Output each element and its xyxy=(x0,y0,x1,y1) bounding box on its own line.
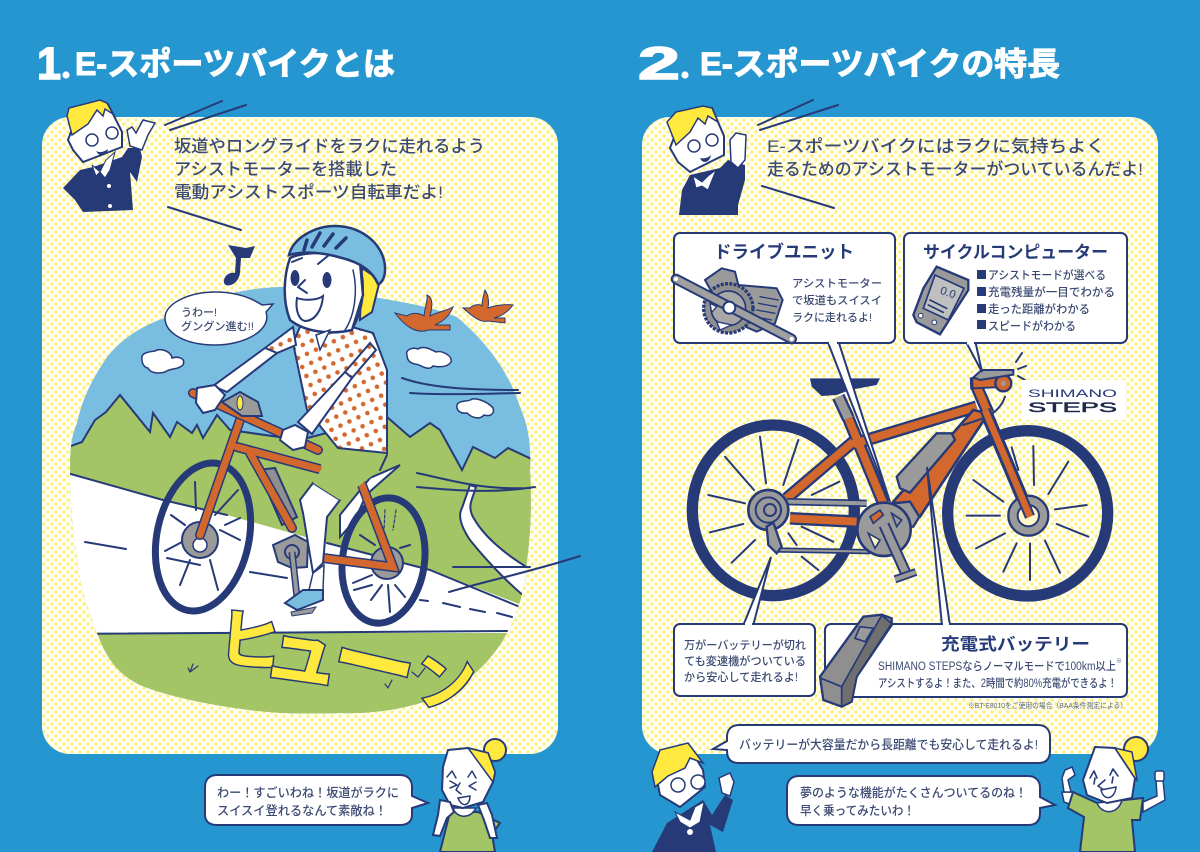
gloves xyxy=(196,385,225,413)
panel: what is an e-sports bike xyxy=(42,117,558,754)
battery on frame xyxy=(897,433,955,493)
text: intro left: 電動アシストスポーツ自転車だよ! xyxy=(174,183,443,202)
callout: cycle computer xyxy=(904,233,1127,372)
character: man bottom xyxy=(652,743,734,852)
speech bubble: woman right: 夢のような機能がたくさんついてるのね！ xyxy=(800,785,1027,800)
callout: battery: SHIMANO STEPSならノーマルモードで100km以上 xyxy=(878,660,1116,673)
speech bubble: woman left xyxy=(205,775,428,825)
far arm xyxy=(213,348,277,392)
callout: battery: ※ xyxy=(1116,659,1122,665)
sock xyxy=(309,565,324,590)
onomatopoeia: hyuun: ー xyxy=(322,611,425,721)
icon: music note xyxy=(224,245,255,285)
sleeve near arm xyxy=(345,343,376,378)
callout: gears: ても変速機がついている xyxy=(684,654,806,668)
callout: cycle computer: 走った距離がわかる xyxy=(988,302,1090,316)
heading: section 2 xyxy=(638,38,1060,89)
text: intro left: 坂道やロングライドをラクに走れるよう xyxy=(174,137,485,156)
panel: features xyxy=(642,117,1158,754)
heading: section 1: 1 xyxy=(37,38,61,89)
helmet xyxy=(289,226,385,284)
speech bubble: woman right xyxy=(787,776,1055,825)
logo: shimano steps xyxy=(1022,380,1125,420)
text: intro left: アシストモーターを搭載した xyxy=(174,160,397,179)
speed lines xyxy=(402,378,580,592)
callout: gears: 万がーバッテリーが切れ xyxy=(684,638,806,652)
chainring xyxy=(857,503,911,556)
text: intro right: 走るためのアシストモーターがついているんだよ! xyxy=(767,159,1143,179)
shoe xyxy=(285,590,323,610)
sleeve far arm xyxy=(265,327,296,353)
cable xyxy=(963,397,1005,425)
speech bubble: woman left: わー！すごいわね！坂道がラクに xyxy=(217,785,399,800)
callout: cycle computer: アシストモードが選べる xyxy=(988,268,1106,282)
speech bubble: woman right: 早く乗ってみたいわ！ xyxy=(800,804,915,818)
light rays xyxy=(1016,353,1026,380)
icon: battery xyxy=(820,615,892,707)
wheel spokes xyxy=(708,437,1088,580)
drive unit xyxy=(273,535,308,568)
callout: gears: から安心して走れるよ! xyxy=(684,670,798,684)
callout: battery xyxy=(820,467,1127,707)
near arm xyxy=(298,372,352,434)
frame xyxy=(200,420,393,567)
collar xyxy=(316,330,330,350)
rear wheel xyxy=(692,425,854,596)
rear sprocket xyxy=(748,490,788,530)
callout: battery: アシストするよ！また、2時間で約80%充電ができるよ！ xyxy=(878,676,1117,690)
hair xyxy=(360,268,380,320)
illustration: e-bike xyxy=(692,370,1108,596)
derailleur xyxy=(767,523,782,553)
callout: cycle computer: サイクルコンピューター xyxy=(923,243,1108,262)
callout: gears xyxy=(674,557,815,696)
character: man waving xyxy=(63,100,155,212)
front wheel xyxy=(948,431,1108,596)
battery on frame xyxy=(258,468,297,525)
footnote: ※BT-E8010をご使用の場合（BAA条件測定による） xyxy=(968,700,1127,710)
handlebar xyxy=(970,382,1010,383)
speech bubble: man bottom: バッテリーが大容量だから長距離でも安心して走れるよ! xyxy=(739,737,1038,752)
other leg xyxy=(340,465,400,537)
illustration: rider on bike xyxy=(142,226,433,629)
callout: drive unit xyxy=(674,233,895,502)
clouds xyxy=(142,347,493,418)
onomatopoeia: hyuun: ュ xyxy=(258,604,348,702)
shorts xyxy=(313,448,387,500)
face xyxy=(290,270,300,286)
seat post xyxy=(838,397,848,418)
illustration: landscape scene xyxy=(70,286,531,714)
onomatopoeia: hyuun xyxy=(214,602,480,721)
icon: drive unit xyxy=(674,268,794,341)
speech bubble: rider xyxy=(165,292,273,345)
callout: cycle computer: 充電残量が一目でわかる xyxy=(988,285,1115,299)
speech bubble: rider: うわー! xyxy=(181,306,217,319)
speech bubble: woman left: スイスイ登れるなんて素敵ね！ xyxy=(217,803,387,818)
onomatopoeia: hyuun: ヒ xyxy=(214,602,286,681)
callout: cycle computer: スピードがわかる xyxy=(988,319,1076,333)
logo: shimano steps: STEPS xyxy=(1028,399,1117,415)
rear wheel xyxy=(334,492,433,629)
logo: shimano steps: SHIMANO xyxy=(1028,388,1118,400)
front disc xyxy=(1008,496,1048,536)
front wheel xyxy=(142,454,264,620)
character: woman right xyxy=(1062,737,1165,852)
icon: computer: 0.0 xyxy=(938,285,957,302)
speech lines: right man xyxy=(758,100,838,208)
heading: section 1 xyxy=(37,38,395,89)
text: intro left xyxy=(174,137,485,202)
chain xyxy=(787,502,867,503)
character: woman left xyxy=(433,739,506,852)
saddle xyxy=(810,378,880,396)
text: intro right: E-スポーツバイクにはラクに気持ちよく xyxy=(767,137,1105,156)
speech bubble: rider: グングン進む!! xyxy=(181,319,254,333)
callout: drive unit: ラクに走れるよ! xyxy=(792,311,872,324)
helmet strap xyxy=(345,265,363,330)
callout: drive unit: で坂道もスイスイ xyxy=(792,293,882,307)
crank and pedal xyxy=(884,525,907,575)
character: man with phone xyxy=(667,106,746,215)
onomatopoeia: hyuun: ン xyxy=(413,646,480,719)
text: intro right xyxy=(767,137,1143,179)
frame xyxy=(787,387,1030,522)
heading: section 2: 2 xyxy=(638,38,680,89)
speech bubble: man bottom xyxy=(713,725,1050,763)
heading: section 1: E-スポーツバイクとは xyxy=(75,46,395,82)
icon: computer xyxy=(913,267,968,334)
head xyxy=(285,253,363,332)
callout: drive unit: ドライブユニット xyxy=(714,242,854,262)
heading: section 2: E-スポーツバイクの特長 xyxy=(700,46,1060,82)
motor xyxy=(893,502,919,527)
callout: battery: 充電式バッテリー xyxy=(941,635,1090,654)
leg xyxy=(300,483,340,573)
speech lines: left man xyxy=(165,101,246,230)
icon: birds xyxy=(395,290,513,331)
shirt xyxy=(293,325,387,453)
callout: drive unit: アシストモーター xyxy=(792,277,882,290)
down tube xyxy=(893,410,988,517)
handlebar xyxy=(193,393,318,450)
